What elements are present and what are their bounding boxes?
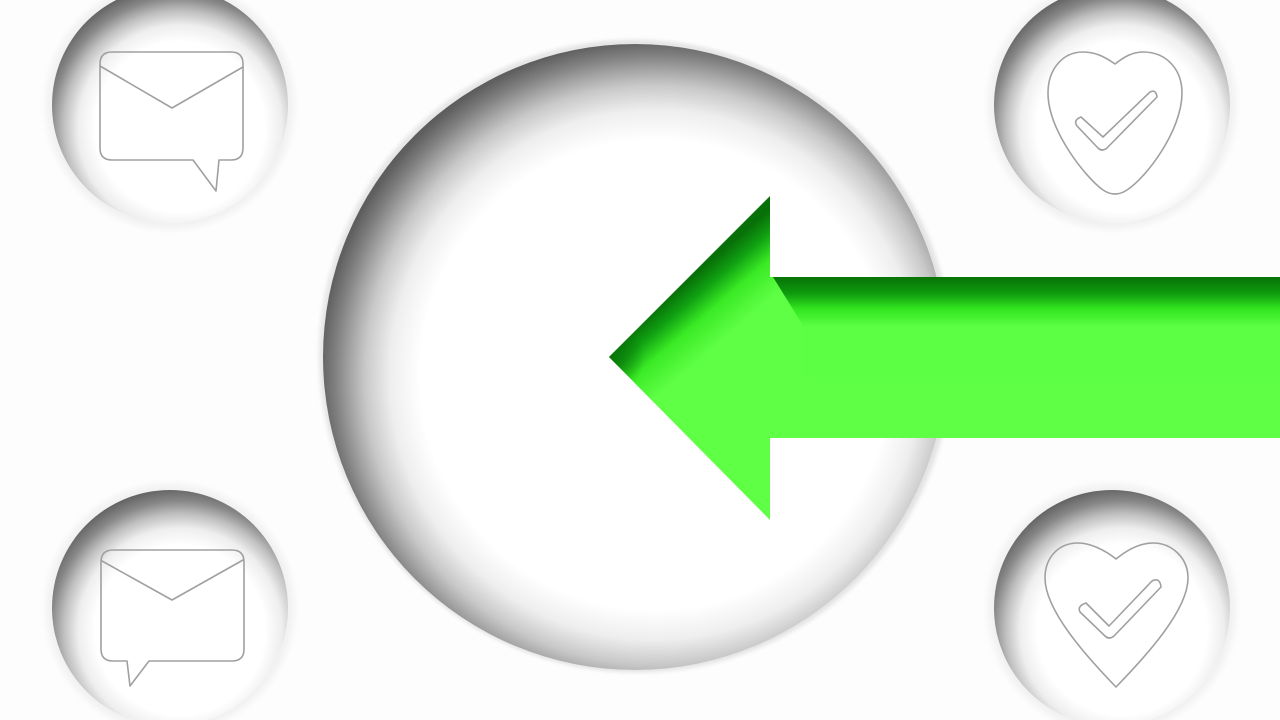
panel: bottom-left circle with mail [52, 490, 288, 720]
arrow shaft [770, 277, 1280, 438]
arrow head [609, 196, 802, 520]
arrow tip shading [609, 306, 660, 408]
arrow: green arrow pointing left [609, 196, 1280, 520]
panel: bottom-right circle with heart [994, 490, 1230, 720]
icon: heart with check mark [1044, 542, 1189, 688]
icon: envelope speech bubble [99, 51, 244, 192]
panel: top-left circle with mail [52, 0, 288, 223]
panel: top-right circle with heart [994, 0, 1230, 223]
panel: large centre circle [323, 44, 947, 670]
icon: heart with check mark [1047, 51, 1183, 195]
icon: envelope speech bubble [100, 549, 245, 687]
